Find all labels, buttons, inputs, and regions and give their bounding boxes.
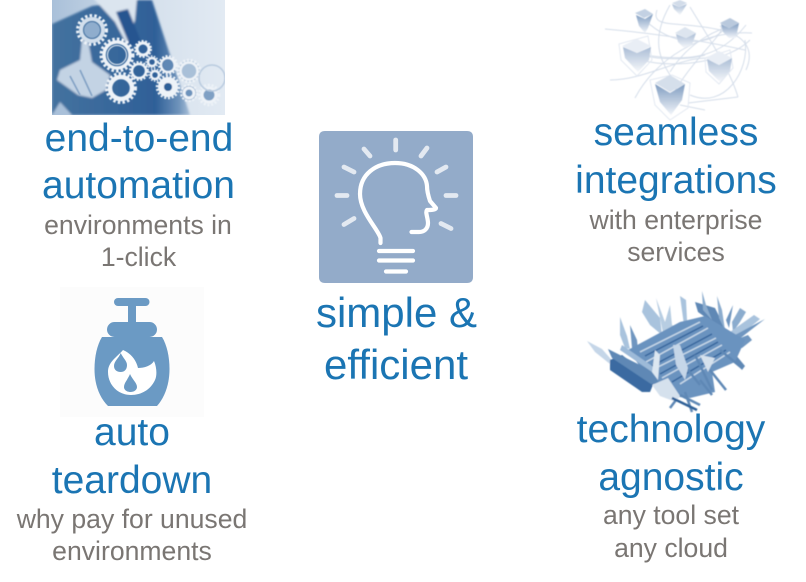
panel: technology agnostic <box>577 291 766 563</box>
text: any tool set any cloud: any cloud <box>614 533 728 563</box>
cubes <box>622 0 739 115</box>
text: with enterprise services: with enterprise <box>589 205 762 235</box>
icon: gears <box>78 16 225 105</box>
heading: end-to-end automation: automation <box>42 164 235 207</box>
text: why pay for unused environments <box>16 504 247 566</box>
text: any tool set any cloud: any tool set <box>603 500 740 530</box>
text: why pay for unused environments: environments <box>52 536 212 566</box>
heading: end-to-end automation <box>42 117 235 207</box>
panel: auto teardown <box>16 287 247 566</box>
text: with enterprise services: services <box>627 237 725 267</box>
text: environments in 1-click: environments in <box>44 210 232 240</box>
heading: simple & efficient: efficient <box>324 341 468 388</box>
heading: auto teardown: teardown <box>52 459 212 502</box>
text: why pay for unused environments: why pay for unused <box>16 504 247 534</box>
heading: technology agnostic <box>577 408 766 499</box>
heading: simple & efficient <box>316 289 477 388</box>
panel: simple and efficient <box>316 131 477 388</box>
heading: technology agnostic: technology <box>577 408 766 451</box>
text: any tool set any cloud <box>603 500 740 563</box>
heading: technology agnostic: agnostic <box>598 456 744 499</box>
heading: simple & efficient: simple & <box>316 289 477 336</box>
image: hand touching gears <box>52 0 225 115</box>
icon: lightbulb head <box>319 131 473 283</box>
heading: seamless integrations: seamless <box>594 111 758 154</box>
panel: seamless integrations <box>575 0 777 267</box>
text: environments in 1-click: 1-click <box>101 242 177 272</box>
heading: seamless integrations <box>575 111 777 202</box>
heading: auto teardown <box>52 411 212 502</box>
text: environments in 1-click <box>44 210 232 272</box>
icon: gas canister with flame <box>60 287 204 417</box>
image: network of cubes <box>605 0 752 120</box>
heading: auto teardown: auto <box>94 411 170 454</box>
image: giant multi-tool knife <box>587 291 765 412</box>
text: with enterprise services <box>589 205 762 267</box>
heading: end-to-end automation: end-to-end <box>45 117 233 160</box>
heading: seamless integrations: integrations <box>575 159 777 202</box>
panel: end-to-end automation <box>42 0 235 272</box>
